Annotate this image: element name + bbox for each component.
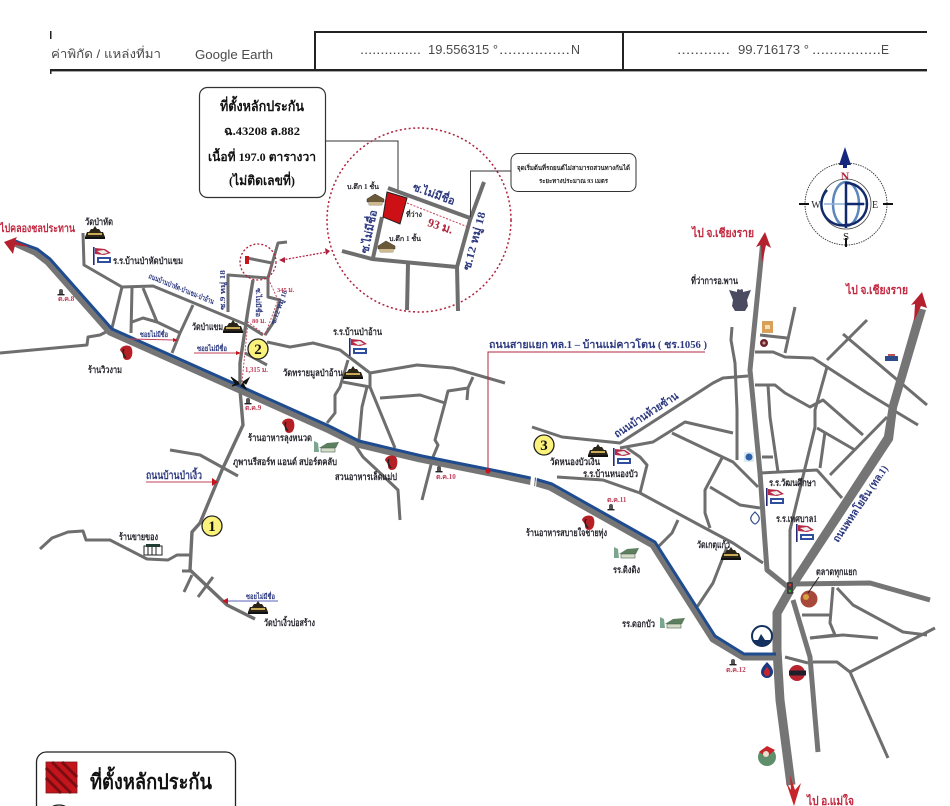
place: Wat Pa Ngio [248, 601, 315, 629]
place: Dok Bua hotel: รร.ดอกบัว [622, 619, 655, 630]
latitude: 19.556315 ° [428, 42, 498, 57]
place: Pa An school [333, 326, 382, 356]
legend swatch [46, 762, 77, 793]
place: Lung Nuat restaurant [248, 419, 312, 444]
place: Ding Ding hotel [613, 547, 640, 576]
north road label: ซ.ไม่มีชื่อ [411, 179, 457, 208]
access note leader [470, 171, 511, 217]
place: Dok Bua hotel [622, 617, 685, 630]
dotted link arrow [279, 248, 330, 263]
locator parcel [245, 256, 249, 264]
compass E: E [872, 200, 878, 211]
alley label 2 [194, 342, 241, 355]
direction arrow north 1 [756, 232, 771, 263]
icon: fuel flame [761, 662, 773, 678]
area: เนื้อที่ 197.0 ตารางวา [208, 147, 316, 164]
icon: small building [885, 354, 898, 361]
waypoint 1 [202, 516, 222, 536]
waypoint 2 [248, 339, 268, 359]
place: grocery: ร้านขายของ [119, 531, 158, 543]
roads west cluster [0, 233, 505, 619]
main highway 1056 [15, 241, 777, 657]
place: Wat Sai Mun Pa An: วัดทรายมูลป่าอ้าน [283, 367, 343, 380]
compass W: W [811, 200, 821, 211]
alley label 1 [130, 328, 178, 342]
soi label 12: ซ.12 หมู่ 18 [269, 289, 290, 326]
km post 11 [607, 496, 627, 510]
direction arrow west [4, 237, 30, 254]
compass N: N [841, 169, 850, 183]
access note box [511, 154, 636, 192]
place: Wat Sai Mun Pa An [283, 366, 363, 380]
place: garden restaurant [335, 456, 397, 483]
source label: ค่าพิกัด / แหล่งที่มา [51, 45, 161, 61]
alley label 3: ซอยไม่มีชื่อ [246, 590, 275, 601]
place: district office: ที่ว่าการอ.พาน [691, 273, 738, 287]
place: Pa An school: ร.ร.บ้านป่าอ้าน [333, 326, 382, 338]
icon: Nissan badge [789, 665, 806, 681]
deed number: ฉ.43208 ล.882 [224, 124, 300, 138]
place: grocery [119, 531, 162, 555]
legend next symbol [45, 805, 73, 806]
waypoint 2: 2 [254, 342, 262, 358]
roads east cluster [731, 240, 935, 785]
place: Phuphan resort [233, 441, 339, 469]
latitude: ............... [360, 42, 421, 57]
place: Thung Yaek market [800, 568, 857, 608]
soi label unnamed: ซ.ไม่มีชื่อ [254, 288, 264, 317]
place: Wat Nong Bua: วัดหนองบัวเงิน [550, 457, 600, 468]
compass rose [799, 147, 893, 247]
place: Nong Bua school [583, 448, 638, 480]
callout leader line [325, 141, 398, 193]
km post 10 [436, 466, 456, 481]
place: Ding Ding hotel: รร.ดิงดิง [613, 565, 640, 576]
callout title: ที่ตั้งหลักประกัน [220, 95, 304, 115]
place: Wattana school: ร.ร.วัฒนศึกษา [769, 477, 816, 489]
alley label 1: ซอยไม่มีชื่อ [140, 328, 168, 339]
km post 12 [726, 659, 746, 674]
route dotted line [242, 263, 278, 382]
place: Sabai Jai restaurant [526, 516, 607, 539]
place: Nong Bua school: ร.ร.บ้านหนองบัว [583, 468, 638, 480]
road label 1056: ถนนสายแยก ทล.1 – บ้านแม่คาวโตน ( ชร.1056 ) [489, 338, 707, 351]
place: garden restaurant: สวนอาหารเล็ดแม่ป [335, 470, 397, 483]
direction label west: ไปคลองชลประทาน [0, 221, 75, 235]
icon: maroon badge [760, 339, 768, 347]
road network [0, 233, 935, 785]
km post 11: ต.ค.11 [607, 496, 627, 504]
east road label: ซ.12 หมู่ 18 [461, 210, 490, 272]
road label 1056 [486, 338, 707, 474]
place: Sabai Jai restaurant: ร้านอาหารสบายใจชายทุ่ง [526, 527, 607, 539]
place: Phuphan resort: ภูพานรีสอร์ท แอนด์ สปอร์ตคลับ [233, 456, 337, 469]
icon: bank emblem [744, 452, 754, 462]
direction label north 2: ไป จ.เชียงราย [844, 282, 908, 297]
compass S: S [843, 231, 849, 243]
access note line 2: ระยะทางประมาณ 93 เมตร [539, 177, 608, 185]
road label Pa Hat: ถนนบ้านป่าหัด-ป่าแขม-ป่าอ้าน [147, 272, 216, 306]
latitude: N [571, 42, 580, 57]
km post 9: ต.ค.9 [245, 404, 262, 412]
place: municipal school [776, 515, 817, 542]
place: Wat Pa Hat [85, 216, 113, 239]
place: Wat Pa Ngio: วัดป่าเงิ้วบ่อสร้าง [264, 615, 315, 629]
header table [50, 31, 927, 74]
place: Wiw Ngam [88, 346, 132, 376]
distance 1315: 1,315 ม. [245, 366, 268, 374]
soi label 9: ซ.9 หมู่ 18 [219, 269, 228, 310]
direction arrow north 2 [911, 292, 927, 321]
latitude: ................ [499, 42, 570, 57]
legend panel [36, 752, 236, 806]
longitude: ................ [812, 42, 881, 57]
distance 345: 345 ม. [277, 287, 295, 294]
icon: boat circle [752, 626, 772, 646]
icon: orange sign [762, 321, 773, 333]
house lower label: บ.ตึก 1 ชั้น [389, 232, 421, 243]
distance line [407, 203, 468, 227]
place: Wiw Ngam: ร้านวิวงาม [88, 364, 122, 376]
place: Wat Nong Bua [550, 444, 608, 468]
empty land label: ที่ว่าง [406, 208, 422, 219]
house upper label: บ.ตึก 1 ชั้น [347, 180, 379, 191]
place: Wat Pa Hat: วัดป่าหัด [85, 216, 113, 228]
place: Wat Pa Khaem: วัดป่าแขม [192, 321, 223, 333]
distance 80: 80 ม. [252, 318, 266, 325]
no house number: (ไม่ติดเลขที่) [229, 171, 295, 188]
longitude [677, 42, 889, 57]
icon: lotus [751, 512, 759, 524]
km post 10: ต.ค.10 [436, 473, 456, 481]
km post 9 [244, 398, 262, 412]
place: Pa Hat school [93, 247, 183, 267]
place: district office [691, 273, 751, 311]
icon: golf badge [758, 746, 776, 766]
collateral parcel [383, 192, 407, 224]
distance label: 93 ม. [426, 215, 455, 237]
km post 12: ต.ค.12 [726, 666, 746, 674]
road label Pa Ngio: ถนนบ้านป่าเงิ้ว [146, 467, 202, 482]
waypoint 3 [534, 435, 554, 455]
place: Lung Nuat restaurant: ร้านอาหารลุงหนวด [248, 432, 312, 444]
direction arrow south [786, 775, 801, 806]
latitude [360, 42, 580, 57]
place: Wat Ket: วัดเกตุแก้ว [697, 539, 730, 551]
inset map circle [327, 128, 511, 312]
legend text: ที่ตั้งหลักประกัน [90, 766, 213, 794]
longitude: E [881, 42, 889, 57]
place: Pa Hat school: ร.ร.บ้านป่าหัดป่าแขม [113, 255, 183, 267]
compass globe [821, 182, 867, 228]
longitude: ............ [677, 42, 730, 57]
km post 8: ต.ค.8 [58, 295, 75, 303]
house upper [367, 194, 384, 205]
place: Wattana school [766, 477, 816, 506]
inset roads [342, 182, 484, 311]
direction label north 1: ไป จ.เชียงราย [690, 225, 754, 240]
waypoint 1: 1 [208, 519, 216, 535]
roads middle cluster [532, 376, 763, 607]
small locator circle [240, 244, 276, 280]
west road label: ซ.ไม่มีชื่อ [356, 208, 380, 255]
place: Wat Ket [697, 539, 741, 560]
alley label 2: ซอยไม่มีชื่อ [197, 342, 227, 353]
road label Phahonyothin: ถนนพหลโยธิน (ทล.1) [830, 462, 891, 545]
icon: traffic light [787, 582, 793, 594]
house lower [378, 241, 395, 252]
waypoint 3: 3 [540, 438, 548, 454]
road label Pa Ngio [146, 467, 218, 486]
source name: Google Earth [195, 47, 273, 62]
place: Thung Yaek market: ตลาดทุกแยก [816, 568, 857, 578]
place: Wat Pa Khaem [192, 320, 243, 333]
callout box: collateral details [200, 88, 326, 198]
road label Huai San: ถนนบ้านห้วยซ้าน [612, 389, 681, 441]
longitude: 99.716173 ° [738, 42, 809, 57]
place: municipal school: ร.ร.เทศบาล1 [776, 515, 817, 525]
alley label 3 [222, 590, 278, 604]
junction arrows [231, 377, 249, 389]
access note line 1: จุดเริ่มต้นที่รถยนต์ไม่สามารถสวนทางกันได้ [517, 162, 630, 172]
km post 8 [58, 289, 75, 303]
